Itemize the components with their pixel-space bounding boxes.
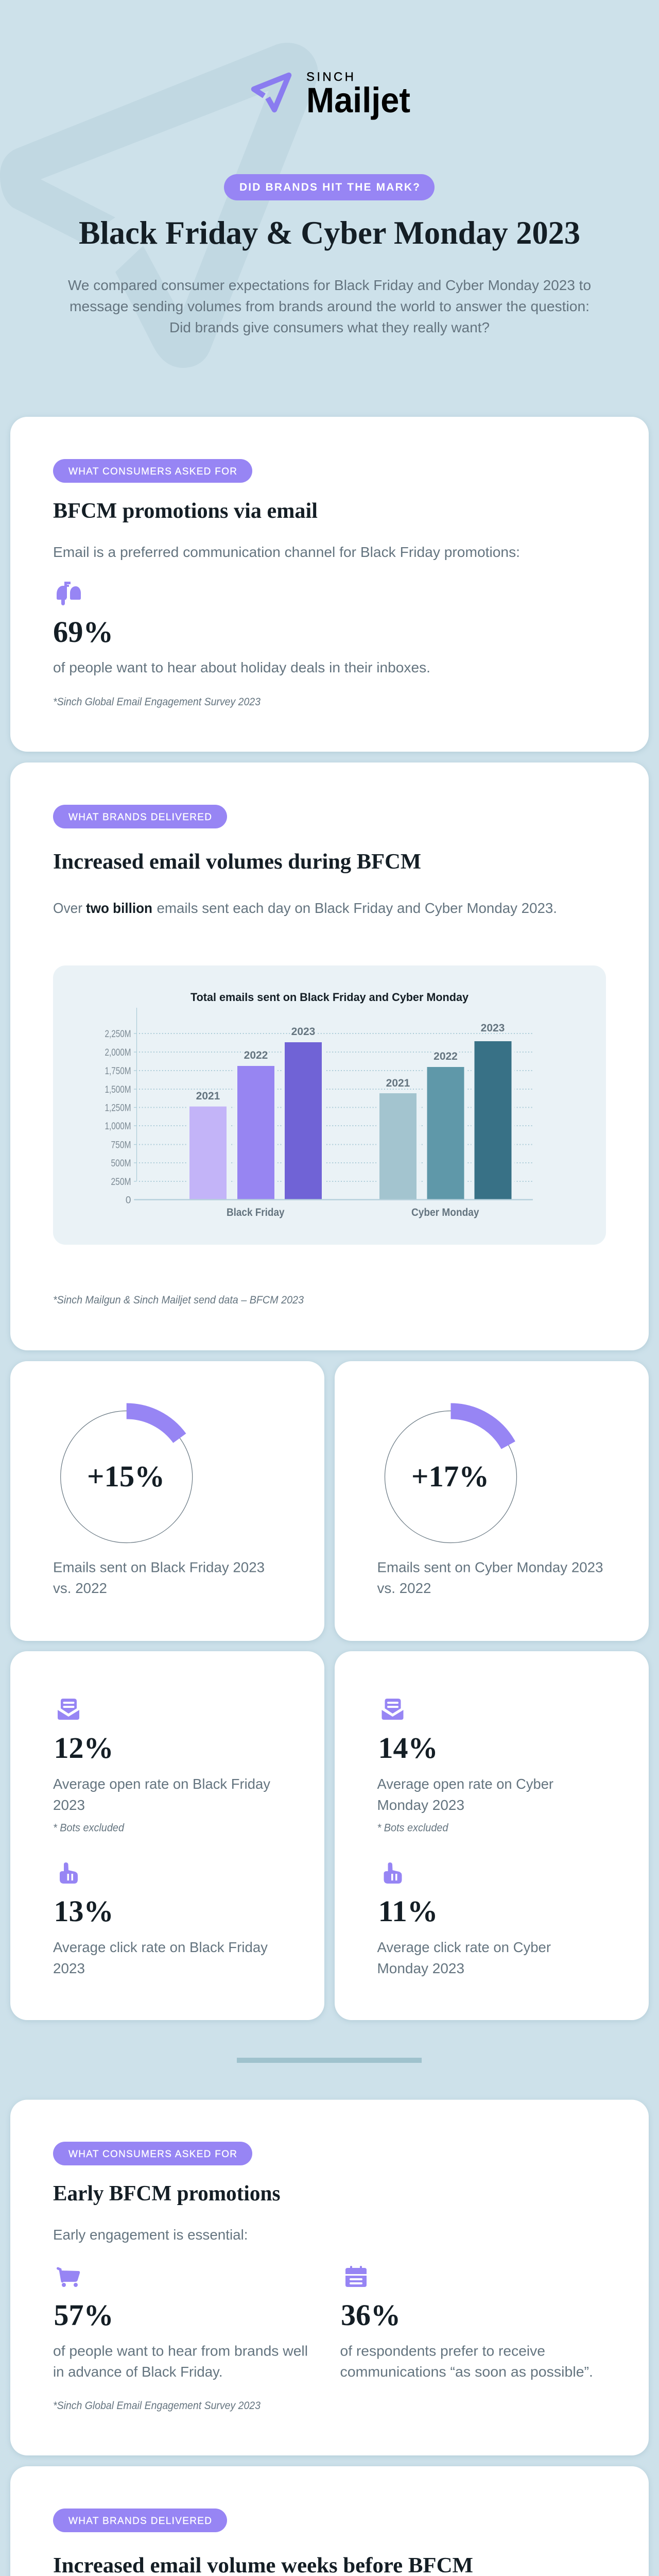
category labels (227, 1207, 479, 1218)
background watermark arrow (0, 43, 318, 368)
bar value labels: 2023 (291, 1026, 315, 1038)
bar value labels: 2022 (244, 1049, 268, 1061)
intro text: message sending volumes from brands around the world to answer the question: (70, 298, 589, 314)
y axis labels: 2,000M (105, 1047, 131, 1058)
icon: calendar (345, 2266, 367, 2287)
panel: Black Friday +15% (10, 1361, 324, 1641)
bars: Black Friday (189, 1042, 322, 1200)
description: Emails sent on Cyber Monday 2023 (377, 1559, 603, 1575)
donut gauge +17% (385, 1411, 517, 1543)
heading: BFCM promotions via email (53, 499, 318, 523)
stat: 57%: 57% (54, 2298, 113, 2332)
stat: 13%: 13% (54, 1894, 113, 1928)
y axis labels: 1,000M (105, 1121, 131, 1132)
intro line: emails sent each day on Black Friday and Cyber Monday 2023. (157, 900, 557, 916)
stat: 14%: 14% (378, 1731, 438, 1765)
bar value labels (196, 1022, 505, 1102)
heading: Early BFCM promotions (53, 2182, 280, 2206)
panel: early BFCM promotions (10, 2100, 649, 2455)
donut gauge +15%: +15% (87, 1460, 165, 1493)
icon: shopping cart (58, 2268, 80, 2287)
bar chart (53, 965, 606, 1245)
stat text: of people want to hear about holiday deals in their inboxes. (53, 659, 430, 675)
stat: 12%: 12% (54, 1731, 113, 1765)
description (377, 1939, 551, 1976)
bar value labels: 2021 (196, 1090, 220, 1102)
intro line: Over (53, 900, 82, 916)
y axis labels: 1,500M (105, 1084, 131, 1095)
description: Average click rate on Cyber (377, 1939, 551, 1955)
description: Emails sent on Black Friday 2023 (53, 1559, 265, 1575)
header pill: DID BRANDS HIT THE MARK? (239, 181, 420, 193)
header logo (254, 70, 410, 120)
title: Black Friday & Cyber Monday 2023 (79, 214, 580, 251)
description: of respondents prefer to receive (340, 2343, 545, 2359)
icon: pointing hand (384, 1862, 402, 1884)
footnote: * Bots excluded (377, 1822, 449, 1834)
description: Average click rate on Black Friday (53, 1939, 268, 1955)
intro line: Early engagement is essential: (53, 2227, 248, 2243)
tag pill (53, 2142, 252, 2165)
intro line: Email is a preferred communication channel for Black Friday promotions: (53, 544, 520, 560)
icon: mailbox (57, 582, 81, 605)
icon: pointing hand (60, 1862, 78, 1884)
description (53, 2343, 308, 2380)
description (53, 1939, 268, 1976)
y axis labels: 750M (111, 1140, 131, 1151)
panel: increased email volume weeks before BFCM (10, 2466, 649, 2576)
description: in advance of Black Friday. (53, 2364, 222, 2380)
footnote: *Sinch Mailgun & Sinch Mailjet send data – BFCM 2023 (53, 1294, 304, 1306)
footnote: * Bots excluded (53, 1822, 125, 1834)
bar value labels: 2021 (386, 1077, 410, 1089)
intro text (68, 277, 591, 335)
tag pill (53, 459, 252, 483)
intro text: Did brands give consumers what they really want? (169, 319, 490, 335)
tag pill: WHAT CONSUMERS ASKED FOR (68, 2149, 237, 2160)
description: 2023 (53, 1797, 85, 1813)
description: Monday 2023 (377, 1960, 464, 1976)
panel: Black Friday rates (10, 1651, 324, 2020)
description (377, 1776, 553, 1813)
tag pill: WHAT BRANDS DELIVERED (68, 2516, 212, 2527)
stat: 69%: 69% (53, 615, 113, 649)
y axis labels (105, 1029, 131, 1206)
intro text: We compared consumer expectations for Black Friday and Cyber Monday 2023 to (68, 277, 591, 293)
tag pill (53, 2509, 227, 2532)
chart title: Total emails sent on Black Friday and Cyber Monday (190, 991, 469, 1004)
donut gauge +15% (61, 1411, 193, 1543)
panel: increased email volumes during BFCM (10, 762, 649, 1350)
description: vs. 2022 (377, 1580, 431, 1596)
description (53, 1776, 270, 1813)
description: 2023 (53, 1960, 85, 1976)
category labels: Black Friday (227, 1207, 285, 1218)
bars: Cyber Monday (379, 1041, 512, 1200)
y axis labels: 500M (111, 1158, 131, 1169)
description: communications “as soon as possible”. (340, 2364, 593, 2380)
donut gauge +17%: +17% (411, 1460, 489, 1493)
y axis labels: 1,250M (105, 1103, 131, 1114)
y axis labels: 2,250M (105, 1029, 131, 1040)
icon: open envelope (58, 1699, 79, 1720)
panel: Cyber Monday +17% (335, 1361, 649, 1641)
icon: paper plane (254, 75, 289, 110)
description (53, 1559, 265, 1596)
bar value labels: 2023 (481, 1022, 505, 1034)
y axis labels: 0 (126, 1195, 131, 1206)
logo wordmark: SINCH (306, 70, 354, 84)
description (340, 2343, 593, 2380)
header pill (224, 174, 435, 200)
y axis labels: 250M (111, 1177, 131, 1188)
description: Average open rate on Black Friday (53, 1776, 270, 1792)
stat: 36%: 36% (341, 2298, 401, 2332)
description: vs. 2022 (53, 1580, 107, 1596)
intro line: two billion (86, 900, 152, 916)
footnote: *Sinch Global Email Engagement Survey 2023 (53, 2400, 261, 2412)
panel: Cyber Monday rates (335, 1651, 649, 2020)
description: of people want to hear from brands well (53, 2343, 308, 2359)
description: Monday 2023 (377, 1797, 464, 1813)
tag pill: WHAT BRANDS DELIVERED (68, 812, 212, 823)
panel: BFCM promotions via email (10, 417, 649, 752)
description: Average open rate on Cyber (377, 1776, 553, 1792)
heading: Increased email volumes during BFCM (53, 850, 421, 874)
logo wordmark: Mailjet (306, 80, 410, 120)
stat: 11%: 11% (378, 1894, 438, 1928)
category labels: Cyber Monday (411, 1207, 479, 1218)
icon: open envelope (382, 1699, 404, 1720)
bar value labels: 2022 (433, 1050, 458, 1062)
footnote: *Sinch Global Email Engagement Survey 2023 (53, 696, 261, 708)
tag pill (53, 805, 227, 828)
tag pill: WHAT CONSUMERS ASKED FOR (68, 466, 237, 477)
description (377, 1559, 603, 1596)
y axis labels: 1,750M (105, 1066, 131, 1077)
